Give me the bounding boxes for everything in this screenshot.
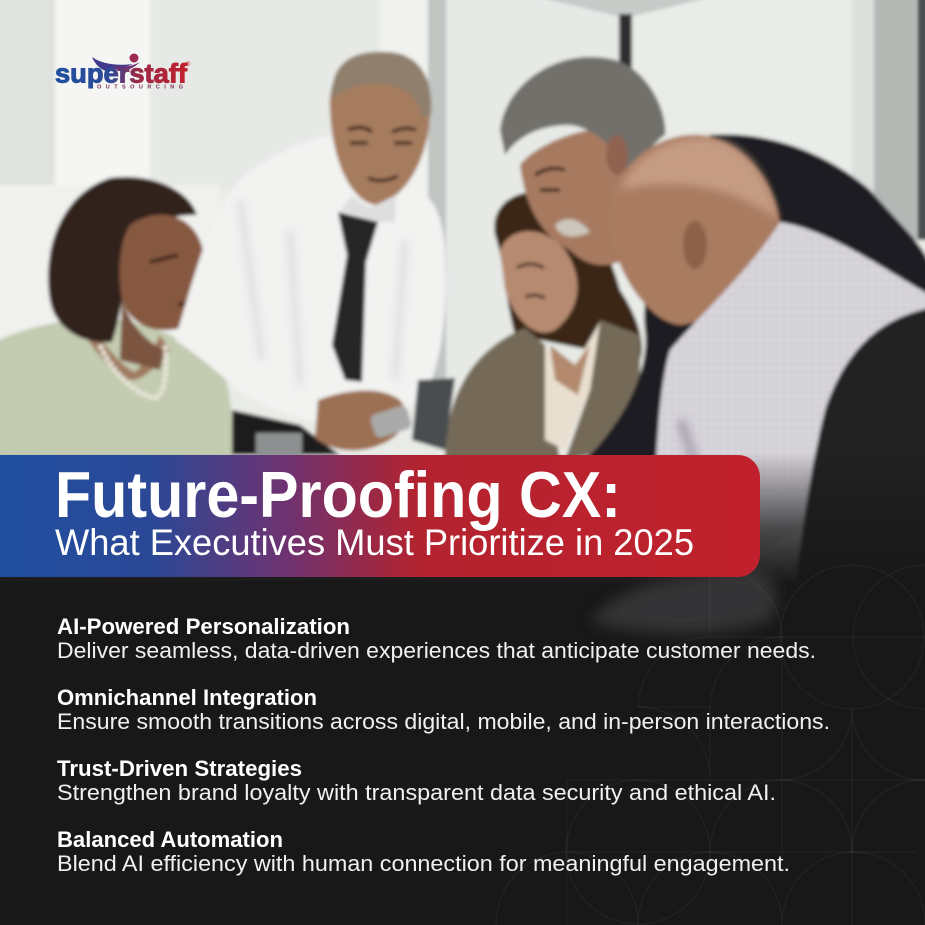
dark base panel: [0, 600, 925, 925]
list item: Omnichannel Integration: [57, 685, 830, 734]
main title: Future-Proofing CX:: [55, 458, 621, 531]
photo: executives around a tablet: [0, 0, 925, 640]
person: bald man in checked shirt: [610, 135, 925, 600]
person: woman in green sweater: [0, 177, 233, 460]
office chair: [790, 308, 925, 640]
logo tagline: OUTSOURCING: [97, 84, 183, 90]
logo wordmark: superstaff: [55, 58, 188, 88]
logo registered mark: ®: [186, 61, 191, 68]
logo: SuperStaff Outsourcing: [55, 54, 191, 90]
list item: Balanced Automation: Blend AI efficiency with human connection for meaningful engagement.: [57, 851, 790, 876]
dark fade over photo: [0, 452, 925, 607]
list item: Trust-Driven Strategies: Trust-Driven Strategies: [57, 756, 302, 781]
logo swoosh tail: [113, 62, 140, 71]
hands faintly visible through fade: [590, 569, 776, 633]
banner background: [0, 455, 760, 577]
person: standing man in white shirt and tie: [175, 52, 445, 457]
list item: AI-Powered Personalization: [57, 614, 816, 663]
title banner: [0, 455, 760, 577]
logo dot: [130, 54, 138, 62]
list item: Trust-Driven Strategies: Strengthen brand loyalty with transparent data security and ethical AI.: [57, 780, 776, 805]
person: woman in tan blazer: [412, 192, 642, 460]
decorative geometric line pattern: [496, 565, 925, 925]
list item: Balanced Automation: Balanced Automation: [57, 827, 283, 852]
list item: AI-Powered Personalization: Deliver seamless, data-driven experiences that anticipate customer needs.: [57, 638, 816, 663]
list item: Omnichannel Integration: Ensure smooth transitions across digital, mobile, and in-person interactions.: [57, 709, 830, 734]
list item: Trust-Driven Strategies: [57, 756, 776, 805]
person: grey-haired man in dark suit: [500, 57, 925, 460]
list item: AI-Powered Personalization: AI-Powered Personalization: [57, 614, 350, 639]
list item: Balanced Automation: [57, 827, 790, 876]
subtitle: What Executives Must Prioritize in 2025: [55, 522, 694, 563]
logo swoosh: [92, 57, 133, 72]
list item: Omnichannel Integration: Omnichannel Integration: [57, 685, 317, 710]
office window background: [0, 0, 925, 605]
